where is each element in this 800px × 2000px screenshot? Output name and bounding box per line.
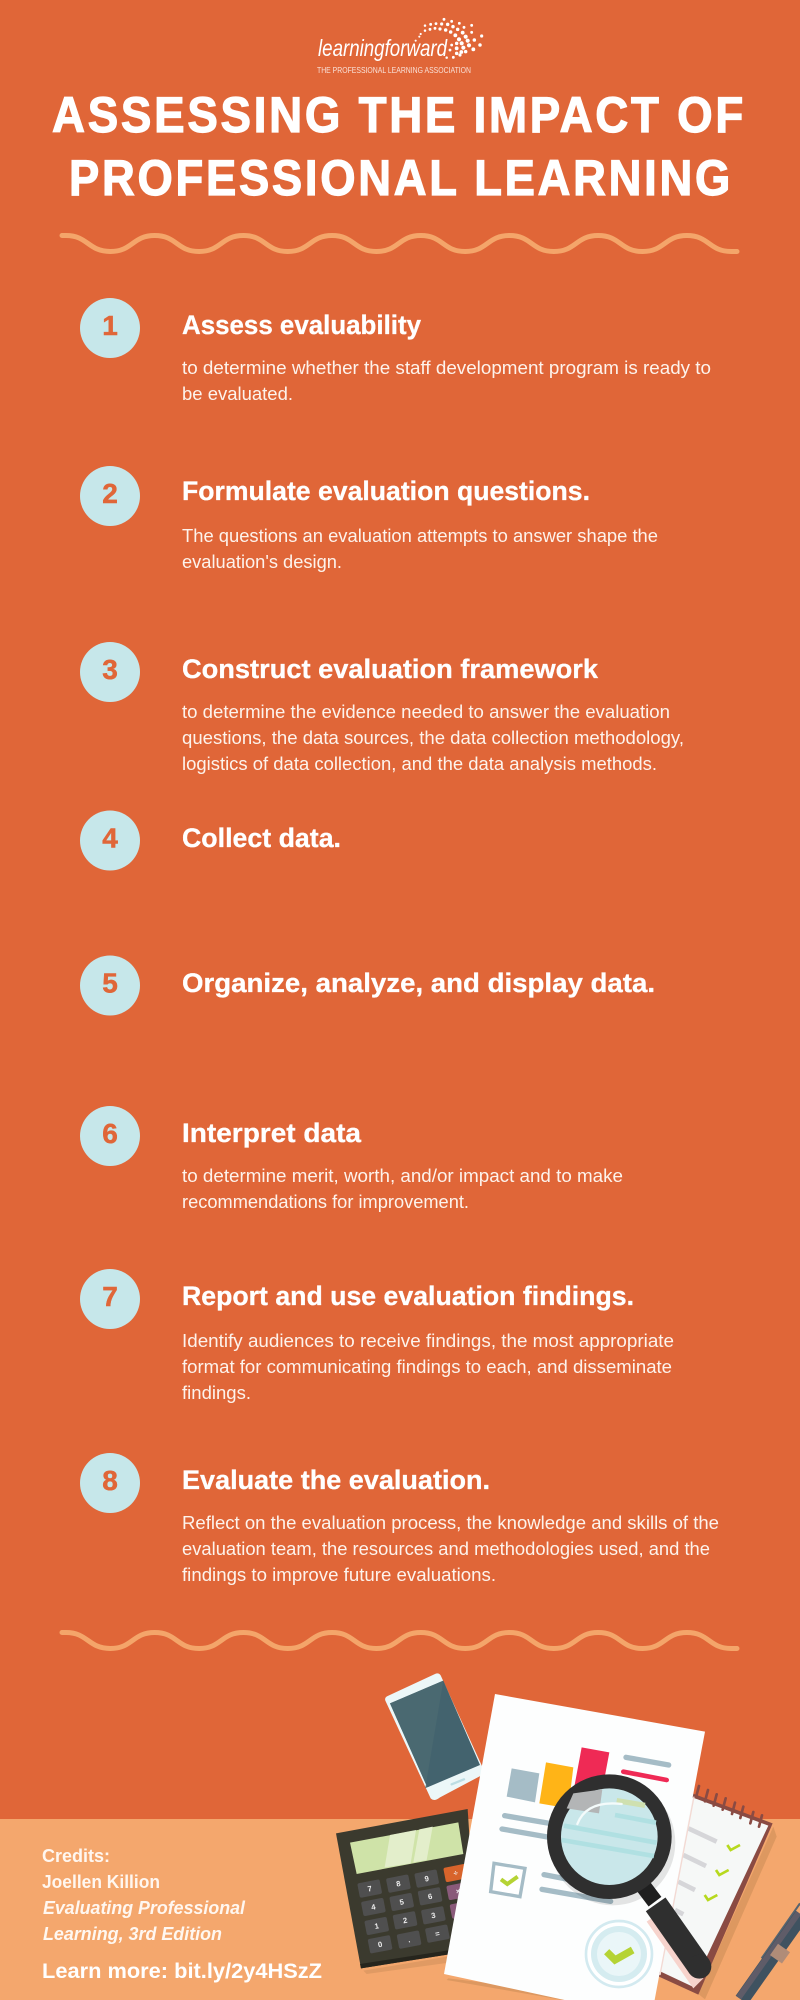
bar chart: [507, 1747, 609, 1808]
step 6: recommendations for improvement.: [182, 1191, 469, 1212]
step 7: Identify audiences to receive findings, the most appropriate: [182, 1330, 674, 1351]
icon: calculator: 0: [377, 1940, 383, 1949]
step 8: Reflect on the evaluation process, the knowledge and skills of the: [182, 1512, 719, 1533]
checkbox: [491, 1863, 525, 1897]
step 6: [80, 1106, 623, 1212]
step 7: Report and use evaluation findings.: [182, 1281, 634, 1311]
step 1: to determine whether the staff development program is ready to: [182, 357, 711, 378]
step 3: questions, the data sources, the data collection methodology,: [182, 727, 684, 748]
step 2: Formulate evaluation questions.: [182, 476, 590, 506]
step 4: [80, 810, 341, 870]
icon: calculator: 3: [430, 1911, 436, 1920]
step 3: Construct evaluation framework: [182, 654, 599, 684]
step 2: evaluation's design.: [182, 551, 342, 572]
title: PROFESSIONAL LEARNING: [69, 150, 733, 206]
illustration: desk with report: [336, 1673, 800, 2000]
icon: calculator: 9: [424, 1874, 430, 1884]
title: ASSESSING THE IMPACT OF: [52, 87, 746, 143]
step 1: Assess evaluability: [182, 310, 421, 340]
icon: calculator: 2: [402, 1916, 408, 1925]
step 8: findings to improve future evaluations.: [182, 1564, 496, 1585]
step 8: 8: [102, 1465, 118, 1496]
step 2: [80, 466, 658, 572]
icon: calculator: 5: [399, 1897, 405, 1907]
learn more link: Learn more: bit.ly/2y4HSzZ: [42, 1960, 322, 1983]
icon: calculator: 7: [367, 1884, 373, 1894]
step 5: 5: [102, 968, 118, 998]
step 4: Collect data.: [182, 823, 341, 853]
logo: learningforward: learningforward: [318, 35, 448, 61]
icon: calculator: 8: [395, 1879, 402, 1889]
icon: calculator: .: [407, 1935, 411, 1944]
credits: Learning, 3rd Edition: [43, 1924, 222, 1944]
icon: magnifying glass: [550, 1780, 711, 1988]
step 6: 6: [102, 1118, 118, 1149]
step 7: findings.: [182, 1382, 251, 1403]
wave divider bottom: [62, 1632, 737, 1648]
step 6: Interpret data: [182, 1118, 362, 1148]
logo: learningforward: THE PROFESSIONAL LEARNING ASSOCIATION: [317, 65, 471, 75]
step 8: Evaluate the evaluation.: [182, 1465, 490, 1495]
icon: pen: [739, 1903, 800, 2000]
icon: approval stamp: [586, 1921, 652, 1987]
step 3: to determine the evidence needed to answer the evaluation: [182, 701, 670, 722]
step 4: 4: [102, 822, 118, 854]
icon: calculator: 6: [427, 1892, 433, 1901]
step 1: be evaluated.: [182, 383, 293, 404]
icon: calculator: [336, 1809, 480, 1974]
step 5: Organize, analyze, and display data.: [182, 968, 655, 998]
step 5: [80, 956, 655, 1016]
step 1: [80, 298, 711, 404]
step 7: 7: [102, 1281, 118, 1312]
icon: calculator: 4: [370, 1902, 377, 1912]
step 7: [80, 1269, 674, 1403]
credits: Credits:: [42, 1846, 110, 1866]
step 3: logistics of data collection, and the data analysis methods.: [182, 753, 657, 774]
step 8: [80, 1453, 719, 1585]
logo: learningforward: [317, 18, 483, 75]
icon: calculator: =: [434, 1929, 441, 1939]
icon: notebook: [647, 1786, 777, 1999]
step 7: format for communicating findings to each, and disseminate: [182, 1356, 672, 1377]
credits: Evaluating Professional: [43, 1898, 246, 1918]
step 2: 2: [102, 478, 118, 509]
wave divider top: [62, 236, 737, 252]
credits: [42, 1846, 246, 1944]
title: [52, 87, 746, 206]
footer band: [0, 1819, 800, 2000]
icon: phone: [385, 1673, 485, 1800]
step 8: evaluation team, the resources and methodologies used, and the: [182, 1538, 710, 1559]
step 3: 3: [102, 654, 118, 685]
step 1: 1: [102, 310, 118, 341]
step 2: The questions an evaluation attempts to answer shape the: [182, 525, 658, 546]
step 6: to determine merit, worth, and/or impact and to make: [182, 1165, 623, 1186]
credits: Joellen Killion: [42, 1872, 160, 1892]
icon: report paper: [444, 1694, 705, 2000]
step 3: [80, 642, 684, 774]
icon: calculator: ×: [455, 1886, 462, 1896]
icon: calculator: 1: [374, 1921, 380, 1931]
icon: calculator: ÷: [453, 1868, 459, 1878]
